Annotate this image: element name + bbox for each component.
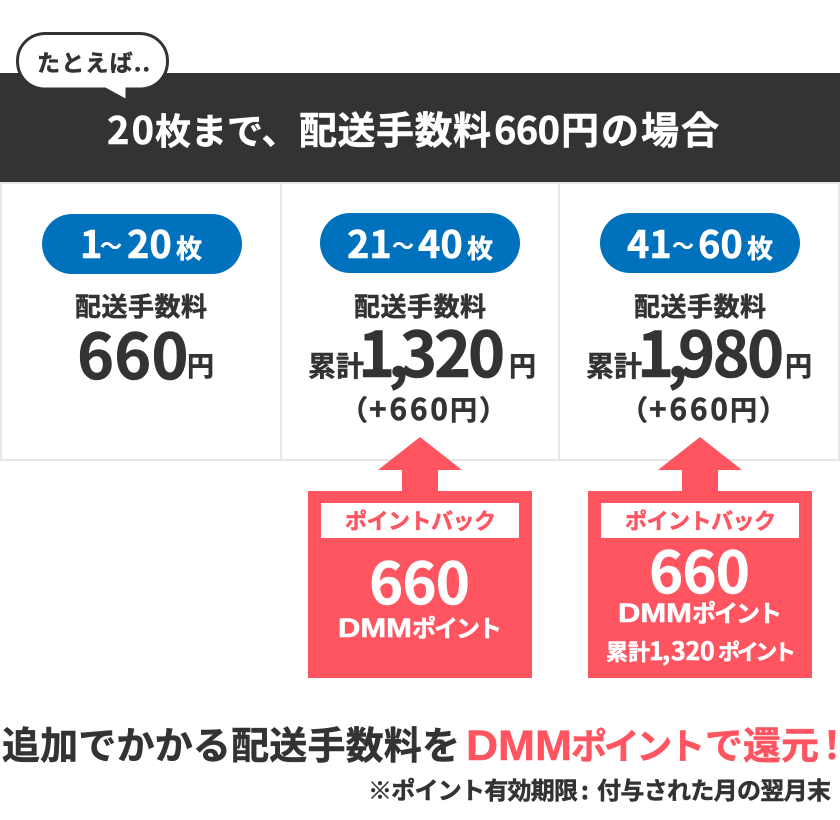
points value: 660	[649, 526, 750, 610]
cumulative amount	[586, 305, 812, 396]
fee label: 配送手数料	[354, 287, 486, 324]
badge: ポイントバック	[321, 503, 519, 538]
fee amount: 660	[77, 307, 189, 398]
footer message	[2, 715, 840, 770]
cumulative amount: 円	[509, 345, 536, 384]
increment	[620, 385, 787, 429]
fee label: 配送手数料	[634, 287, 766, 324]
footnote: ※ポイント有効期限	[368, 771, 578, 806]
cumulative amount	[308, 305, 536, 396]
footer message: ポイント	[571, 718, 705, 770]
increment: （	[340, 389, 368, 429]
increment: （	[620, 389, 648, 429]
title text: 660	[494, 100, 560, 155]
badge: ポイントバック	[601, 503, 799, 538]
increment: +660	[649, 385, 728, 429]
pill: 1~20枚: 枚	[176, 229, 202, 266]
cumulative points	[606, 632, 796, 668]
pill: 21~40枚: 〜	[392, 229, 414, 261]
footer message: DMM	[466, 722, 572, 770]
cumulative points: 1,320	[649, 632, 715, 668]
cumulative amount: 円	[785, 345, 812, 384]
cumulative points: 累計	[606, 635, 650, 667]
cumulative amount: 累計	[308, 345, 364, 385]
panel: tier 41-60	[586, 213, 812, 429]
footnote: 付与された月の翌月末	[597, 771, 831, 806]
panel: tier 1-20	[42, 214, 242, 398]
pill: 41~60枚	[600, 213, 800, 273]
fee label: 配送手数料	[75, 287, 207, 324]
title text: 枚まで、	[155, 103, 298, 155]
footnote	[368, 771, 831, 806]
pill: 1~20枚: 20	[127, 214, 172, 269]
pill: 21~40枚: 21	[347, 214, 392, 269]
arrow: points back to tier 21-40	[378, 437, 462, 492]
pill: 41~60枚: 60	[698, 214, 743, 269]
points unit: ポイント	[412, 609, 502, 644]
points unit: DMM	[618, 598, 692, 628]
panel: tier 21-40	[308, 213, 536, 429]
footnote: :	[581, 771, 589, 806]
speech bubble: たとえば..	[18, 34, 168, 101]
points value: 660	[369, 537, 470, 621]
pill: 1~20枚: 1	[80, 214, 102, 269]
increment: 円	[730, 389, 757, 428]
points unit: DMM	[338, 613, 412, 643]
increment: 円	[450, 389, 477, 428]
pill: 21~40枚: 枚	[467, 229, 493, 266]
badge: ポイントバック: ポイントバック	[345, 504, 496, 536]
footer message: で還元	[705, 715, 819, 770]
panel: point back cumulative 1,320	[588, 491, 812, 678]
title text	[107, 100, 719, 155]
points unit	[618, 594, 782, 629]
speech bubble: たとえば..: たとえば..	[37, 44, 150, 78]
pill: 41~60枚: 枚	[747, 229, 773, 266]
pill: 1~20枚	[42, 214, 242, 274]
increment: +660	[369, 385, 448, 429]
fee amount: 円	[187, 345, 214, 384]
title text: 20	[107, 100, 154, 155]
cumulative points: ポイント	[718, 635, 796, 667]
arrow: points back to tier 41-60	[658, 437, 742, 492]
cumulative amount: 1,320	[358, 305, 505, 396]
badge: ポイントバック: ポイントバック	[625, 504, 776, 536]
pill: 1~20枚: 〜	[100, 229, 122, 261]
title banner	[0, 73, 840, 183]
increment: ）	[479, 389, 507, 429]
cumulative amount: 1,980	[637, 305, 784, 396]
increment: ）	[759, 389, 787, 429]
panel: point back 660	[308, 491, 532, 678]
title text: 円の場合	[561, 100, 719, 155]
pill: 41~60枚: 41	[627, 214, 672, 269]
title text: 配送手数料	[299, 100, 491, 155]
pill: 41~60枚: 〜	[672, 229, 694, 261]
cumulative amount: 累計	[586, 345, 642, 385]
footer message: 追加でかかる配送手数料を	[2, 715, 460, 770]
pill: 21~40枚	[320, 213, 520, 273]
increment	[340, 385, 507, 429]
tier table	[1, 183, 839, 460]
points unit: ポイント	[692, 594, 782, 629]
pill: 21~40枚: 40	[418, 214, 463, 269]
points unit	[338, 609, 502, 644]
